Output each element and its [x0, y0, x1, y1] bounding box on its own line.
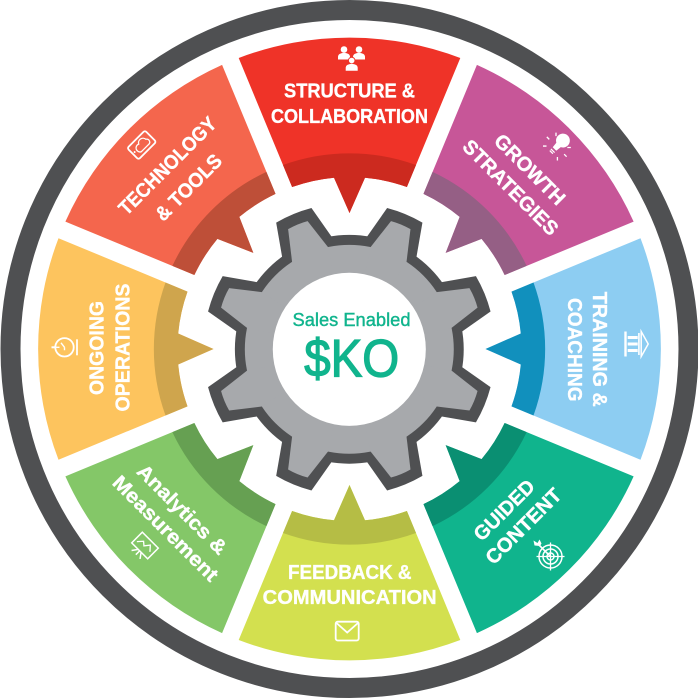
label: training and coaching: TRAINING &	[588, 292, 610, 407]
icon: temple	[624, 332, 648, 356]
icon: tablet with cloud	[127, 131, 156, 159]
label: training and coaching: COACHING	[563, 298, 585, 402]
label: guided content: CONTENT	[482, 484, 566, 569]
label: guided content: GUIDED	[470, 476, 540, 546]
icon: stopwatch	[52, 338, 77, 356]
label: feedback and communication: FEEDBACK &	[288, 562, 412, 584]
icon: envelope	[336, 622, 359, 640]
panel: analytics and measurement	[51, 367, 332, 648]
icon: light bulb	[540, 126, 578, 163]
central gear	[204, 204, 495, 495]
label: ongoing operations	[87, 284, 134, 412]
label: training and coaching	[563, 292, 610, 407]
label: structure and collaboration: STRUCTURE &	[284, 81, 415, 103]
label: structure and collaboration: COLLABORATION	[271, 106, 428, 128]
label: ongoing operations: OPERATIONS	[112, 284, 134, 412]
label: growth strategies: GROWTH	[489, 130, 569, 210]
icon: target with arrow	[534, 540, 564, 570]
panel: structure and collaboration	[239, 38, 460, 213]
panel: training and coaching	[486, 238, 661, 460]
panel: guided content	[367, 367, 648, 648]
panel: growth strategies	[367, 50, 648, 331]
label: growth strategies: STRATEGIES	[458, 136, 562, 240]
label: ongoing operations: ONGOING	[87, 301, 109, 395]
centre title: sales enabled: Sales Enabled	[292, 309, 410, 330]
panel: technology and tools	[51, 50, 332, 331]
label: analytics and measurement: Measurement	[108, 472, 223, 587]
label: technology and tools: & TOOLS	[151, 150, 227, 226]
icon: people	[338, 46, 365, 71]
label: technology and tools: TECHNOLOGY	[115, 113, 222, 220]
icon: presentation chart	[128, 532, 158, 563]
label: analytics and measurement: Analytics &	[132, 461, 231, 560]
centre title: $KO: $KO	[304, 330, 399, 389]
label: feedback and communication: COMMUNICATION	[263, 587, 437, 609]
panel: feedback and communication	[239, 485, 460, 660]
panel: ongoing operations	[38, 238, 214, 460]
